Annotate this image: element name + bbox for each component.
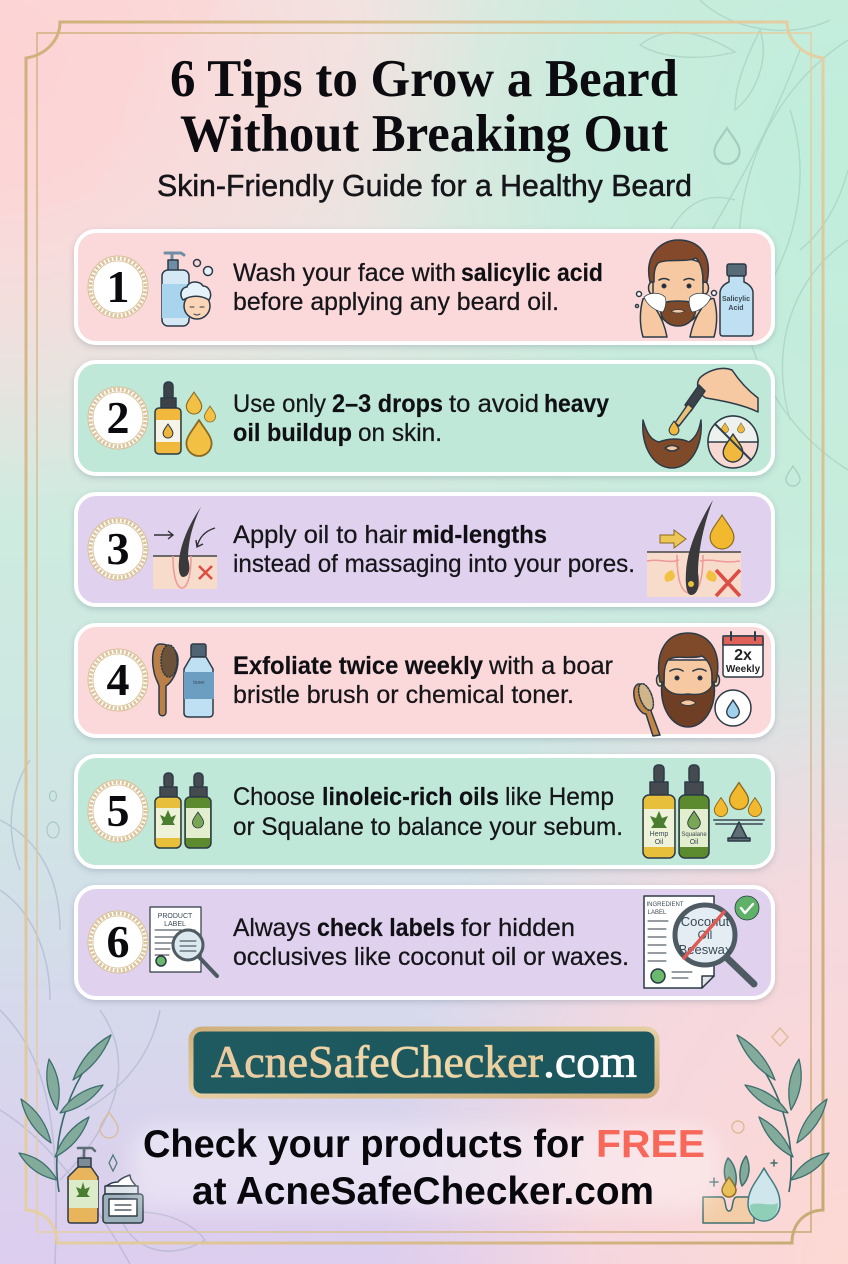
number badge 3 — [88, 518, 148, 580]
panel 3: mid-lengths — [76, 494, 773, 605]
number badge 1: 1 — [106, 261, 130, 312]
decorative lower-left line leaves — [0, 760, 205, 1264]
text: tip 5: Choose — [233, 783, 315, 811]
text: tip 2: Use only — [233, 390, 326, 418]
card 2 — [76, 362, 773, 474]
left botanical branch — [19, 1035, 111, 1192]
panel 2: limited drops — [76, 362, 773, 474]
call to action: at AcneSafeChecker.com — [192, 1170, 654, 1213]
sparkle and droplet left — [100, 1112, 118, 1171]
number badge 1 — [88, 256, 148, 318]
text: tip 6: for hidden — [461, 914, 575, 942]
text: tip 2: to avoid — [449, 390, 539, 418]
right botanical branch — [737, 1035, 829, 1192]
text: tip 1: Wash your face with — [233, 259, 456, 287]
number badge 6 — [88, 911, 148, 973]
text: tip 6 — [233, 914, 629, 971]
number badge 6: 6 — [106, 916, 130, 967]
text: tip 4: bristle brush or chemical toner. — [233, 681, 574, 709]
text: tip 2 — [233, 390, 609, 447]
panel 6: check labels — [76, 887, 773, 998]
text: tip 1: before applying any beard oil. — [233, 288, 559, 316]
illustration: labelled oils and balance scale: Hemp — [650, 831, 668, 838]
title: Without Breaking Out — [180, 105, 668, 163]
card 4 — [76, 625, 773, 736]
icon: product label under magnifier — [150, 907, 217, 976]
icon: hemp and squalane bottles — [155, 773, 211, 848]
text: tip 6: occlusives like coconut oil or waxes. — [233, 943, 629, 971]
decorative droplets — [47, 128, 800, 838]
text: tip 6: Always — [233, 914, 311, 942]
text: tip 2: on skin. — [358, 419, 442, 447]
sparkle and ring right — [732, 1028, 788, 1133]
illustration: ingredient label with coconut oil crossed out: Oil — [698, 928, 712, 942]
call to action: FREE — [596, 1123, 705, 1166]
icon: product label under magnifier: LABEL — [164, 921, 186, 928]
icon: pump bottle and foamy face — [162, 253, 212, 326]
text: tip 2: heavy — [544, 390, 609, 418]
illustration: labelled oils and balance scale: Oil — [655, 839, 664, 846]
illustration: ingredient label with coconut oil crossed out — [644, 896, 759, 988]
text: tip 3: mid-lengths — [412, 521, 547, 549]
icon: hemp pump bottle and cream jar — [68, 1148, 143, 1223]
text: tip 1 — [233, 259, 603, 316]
icon: boar bristle brush and toner bottle — [153, 644, 214, 717]
number badge 5: 5 — [106, 785, 130, 836]
icon: boar bristle brush and toner bottle: toner — [193, 680, 205, 686]
number badge 5 — [88, 780, 148, 842]
soft glow behind call to action — [130, 1125, 720, 1210]
icon: dropper bottle and oil drops — [155, 382, 216, 456]
call to action — [143, 1123, 705, 1213]
illustration: man washing beard and salicylic acid bottle: Salicylic — [722, 296, 750, 303]
illustration: man washing beard and salicylic acid bottle: Acid — [728, 305, 744, 312]
text: tip 5 — [233, 783, 623, 841]
text: tip 3: Apply oil to hair — [233, 521, 407, 549]
illustration: labelled oils and balance scale — [643, 765, 764, 858]
number badge 2: 2 — [106, 392, 130, 443]
card 6 — [76, 887, 773, 998]
website banner: AcneSafeChecker — [211, 1037, 543, 1087]
decorative botanical lines — [640, 0, 848, 470]
illustration: ingredient label with coconut oil crossed out: Beeswax — [679, 942, 732, 957]
illustration: ingredient label with coconut oil crossed out: LABEL — [648, 910, 667, 916]
text: tip 4: with a boar — [488, 652, 613, 680]
number badge 4: 4 — [106, 654, 130, 705]
title: 6 Tips to Grow a Beard — [170, 50, 678, 108]
illustration: bearded man, brush, calendar and drop: Weekly — [726, 664, 761, 675]
illustration: labelled oils and balance scale: Squalane — [681, 832, 707, 838]
number badge 4 — [88, 649, 148, 711]
illustration: man washing beard and salicylic acid bottle — [636, 240, 753, 337]
text: tip 2: 2–3 drops — [332, 390, 443, 418]
illustration: hand with dropper over beard and crossed-out oily skin — [643, 368, 758, 468]
website banner: .com — [543, 1037, 637, 1087]
illustration: ingredient label with coconut oil crossed out: Coconut — [681, 914, 730, 929]
call to action: Check your products for — [143, 1123, 584, 1166]
number badge 3: 3 — [106, 523, 130, 574]
card 3 — [76, 494, 773, 605]
icon: product label under magnifier: PRODUCT — [158, 913, 193, 920]
number badge 2 — [88, 387, 148, 449]
text: tip 3: instead of massaging into your pores. — [233, 550, 635, 578]
text: tip 2: oil buildup — [233, 419, 352, 447]
icon: skin layer with oil and water drop — [703, 1156, 780, 1223]
text: tip 5: linoleic-rich oils — [322, 783, 499, 811]
panel 1: wash face — [76, 231, 773, 343]
text: tip 1: salicylic acid — [461, 259, 603, 287]
illustration: bearded man, brush, calendar and drop — [634, 632, 763, 736]
icon: hair follicle with arrows — [153, 507, 217, 589]
title — [170, 50, 678, 163]
text: tip 4: Exfoliate twice weekly — [233, 652, 483, 680]
illustration: labelled oils and balance scale: Oil — [690, 839, 699, 846]
card 1 — [76, 231, 773, 343]
text: tip 4 — [233, 652, 613, 709]
subtitle: Skin-Friendly Guide for a Healthy Beard — [157, 168, 692, 203]
card 5 — [76, 756, 773, 867]
text: tip 5: or Squalane to balance your sebum. — [233, 813, 623, 841]
panel 4: exfoliate — [76, 625, 773, 736]
text: tip 3 — [233, 521, 635, 578]
illustration: bearded man, brush, calendar and drop: 2x — [734, 647, 752, 664]
panel 5: linoleic-rich oils — [76, 756, 773, 867]
website banner — [191, 1029, 657, 1096]
illustration: ingredient label with coconut oil crossed out: INGREDIENT — [646, 902, 684, 908]
text: tip 6: check labels — [317, 914, 455, 942]
illustration: oil applied to hair shaft, not pore — [647, 500, 741, 597]
text: tip 5: like Hemp — [505, 783, 614, 811]
